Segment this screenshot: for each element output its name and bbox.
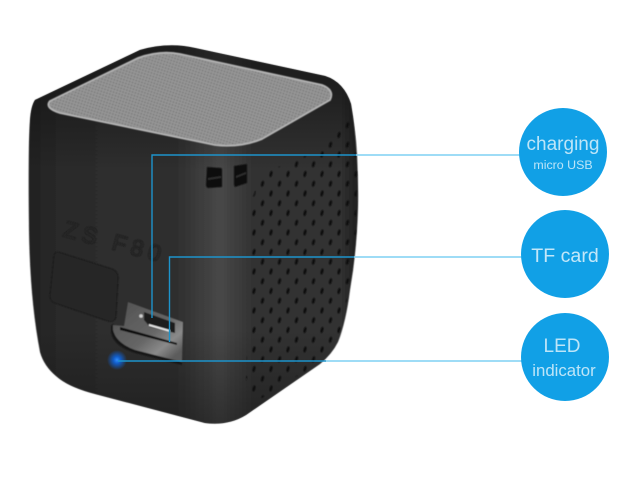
badge: LED indicator [521, 313, 609, 401]
rubber port flap [50, 252, 118, 321]
speaker [29, 45, 358, 424]
callout line: charging [152, 155, 520, 318]
port panel [111, 302, 183, 365]
micro USB socket [144, 312, 175, 333]
callout line: TF card [170, 257, 522, 342]
bottom shading [40, 330, 345, 424]
badge: charging micro USB [519, 108, 607, 196]
badge: charging micro USB: micro USB [533, 158, 593, 172]
badge: LED indicator: LED [544, 336, 580, 357]
TF card slot [120, 327, 177, 345]
badge: LED indicator: indicator [532, 361, 596, 380]
embossed logo: ZS F80 [61, 216, 164, 267]
vent slots [206, 164, 247, 188]
badge: TF card [521, 210, 609, 298]
LED glow [107, 350, 127, 370]
callout line: LED [118, 360, 522, 362]
body shading [29, 45, 358, 170]
badge: charging micro USB: charging [527, 134, 599, 155]
speaker body [29, 45, 358, 424]
top speaker grille [48, 53, 331, 146]
badge: TF card: TF card [531, 245, 599, 267]
perforated side grille [246, 105, 357, 398]
